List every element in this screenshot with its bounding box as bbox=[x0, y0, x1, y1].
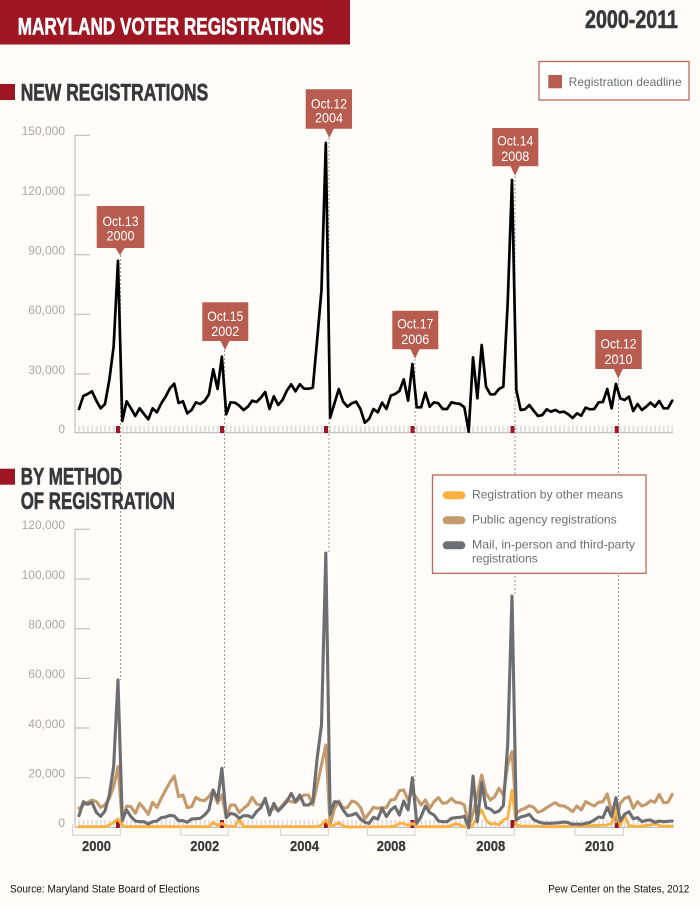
heading: new registrations bbox=[0, 80, 208, 107]
year brackets and labels: 2002 bbox=[190, 838, 219, 855]
registration by other means line bbox=[79, 790, 672, 828]
callout: Oct.12 2004 bbox=[306, 89, 352, 138]
callout: Oct.14 2008: Oct.14 bbox=[497, 133, 533, 149]
callout: Oct.15 2002 bbox=[202, 302, 248, 350]
y axis and labels: 90,000 bbox=[28, 244, 65, 258]
line chart: by method of registration bbox=[22, 518, 673, 830]
callout: Oct.17 2006: 2006 bbox=[401, 331, 429, 347]
callout: Oct.14 2008 bbox=[492, 128, 538, 176]
year brackets and labels: 2008 bbox=[476, 838, 505, 855]
x axis ticks bbox=[75, 824, 673, 827]
callout: Oct.17 2006 bbox=[392, 311, 438, 359]
callout: Oct.13 2000: Oct.13 bbox=[102, 213, 139, 229]
deadline markers bbox=[116, 820, 619, 828]
year brackets and labels: 2010 bbox=[585, 838, 614, 855]
y axis and labels: 40,000 bbox=[28, 717, 65, 731]
total registrations line bbox=[79, 143, 672, 432]
year brackets and labels: 2004 bbox=[290, 838, 320, 855]
callout: Oct.12 2010 bbox=[595, 330, 642, 379]
x axis ticks bbox=[75, 429, 673, 433]
year brackets and labels: 2008 bbox=[377, 838, 406, 855]
y axis and labels: 120,000 bbox=[22, 184, 65, 198]
y axis and labels: 100,000 bbox=[22, 568, 65, 582]
heading: by method of registration: OF REGISTRATION bbox=[21, 488, 175, 515]
callout: Oct.12 2010: 2010 bbox=[604, 351, 633, 367]
callout: Oct.12 2004: 2004 bbox=[315, 110, 343, 126]
y axis and labels bbox=[22, 518, 90, 830]
legend: registration methods: Mail, in-person and third-party bbox=[472, 537, 635, 551]
public agency registrations line bbox=[79, 745, 672, 827]
heading: by method of registration: BY METHOD bbox=[21, 464, 122, 491]
y axis and labels: 150,000 bbox=[22, 124, 65, 138]
legend: registration methods: Public agency registrations bbox=[472, 512, 617, 526]
credit note: Pew Center on the States, 2012 bbox=[548, 884, 689, 896]
title banner: MARYLAND VOTER REGISTRATIONS bbox=[18, 14, 324, 41]
date range: 2000-2011 bbox=[585, 6, 678, 34]
heading: new registrations: NEW REGISTRATIONS bbox=[21, 80, 208, 107]
callout: Oct.12 2004: Oct.12 bbox=[311, 95, 347, 111]
connector lines: registration deadlines bbox=[120, 138, 618, 800]
y axis and labels: 60,000 bbox=[28, 667, 65, 681]
legend: registration deadline bbox=[539, 62, 689, 100]
y axis and labels bbox=[22, 124, 90, 436]
y axis and labels: 0 bbox=[58, 816, 65, 830]
callout: Oct.12 2010: Oct.12 bbox=[600, 335, 637, 351]
callout: Oct.14 2008: 2008 bbox=[501, 148, 529, 164]
year brackets and labels bbox=[73, 824, 623, 855]
callout: Oct.17 2006: Oct.17 bbox=[397, 316, 433, 332]
callout: Oct.13 2000 bbox=[97, 206, 144, 255]
title banner bbox=[0, 0, 350, 44]
deadline markers bbox=[116, 426, 619, 433]
legend: registration methods bbox=[432, 475, 646, 573]
year brackets and labels: 2000 bbox=[82, 838, 111, 855]
legend: registration methods: Registration by other means bbox=[472, 487, 623, 501]
source note: Source: Maryland State Board of Elections bbox=[10, 884, 200, 896]
y axis and labels: 0 bbox=[58, 422, 65, 436]
callout: Oct.13 2000: 2000 bbox=[106, 228, 135, 244]
callout: Oct.15 2002: 2002 bbox=[211, 323, 239, 339]
mail, in-person and third-party registrations line bbox=[79, 553, 672, 828]
y axis and labels: 30,000 bbox=[28, 363, 65, 377]
y axis and labels: 20,000 bbox=[28, 766, 65, 780]
callout: Oct.15 2002: Oct.15 bbox=[207, 308, 243, 324]
y axis and labels: 60,000 bbox=[28, 303, 65, 317]
legend: registration deadline: Registration deadline bbox=[569, 75, 682, 89]
legend: registration methods: registrations bbox=[472, 551, 538, 565]
heading: by method of registration bbox=[0, 464, 175, 515]
y axis and labels: 80,000 bbox=[28, 618, 65, 632]
line chart: new registrations bbox=[22, 124, 673, 436]
y axis and labels: 120,000 bbox=[22, 518, 65, 532]
